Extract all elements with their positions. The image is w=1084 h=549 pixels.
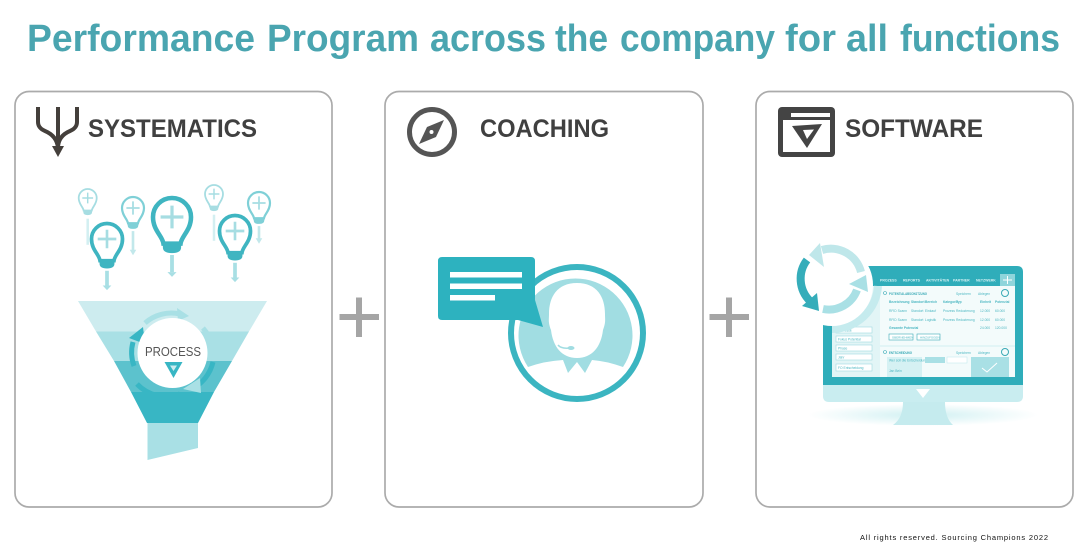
section: potential table: Standort	[911, 309, 924, 313]
title: Program	[267, 18, 419, 60]
title	[27, 18, 1060, 60]
icon: light bulbs	[79, 185, 270, 290]
monitor shadow	[808, 404, 1038, 426]
section: potential table: Potenzial	[995, 300, 1010, 304]
section: potential table: Ablegen	[978, 292, 990, 296]
section: potential table: HINZUFÜGEN	[920, 336, 940, 340]
sidebar: Jahr	[838, 356, 845, 360]
section: potential table: Einkauf	[925, 309, 936, 313]
nav bar: PARTNER	[953, 278, 970, 282]
section: decision: Ablegen	[978, 351, 990, 355]
heading: software: SOFTWARE	[845, 115, 983, 143]
heading: coaching: COACHING	[480, 115, 609, 143]
title: the	[555, 18, 608, 60]
section: potential table: Prozess	[943, 309, 955, 313]
sync arrows	[791, 243, 878, 329]
head	[549, 283, 605, 358]
title: across	[430, 18, 546, 60]
section: potential table: 12.000	[980, 318, 990, 322]
section: potential table: Reduzierung	[956, 318, 975, 322]
footer: All rights reserved. Sourcing Champions 2022	[860, 533, 1048, 542]
section: potential table: 120.000	[995, 326, 1007, 330]
title: functions	[900, 18, 1060, 60]
nav bar	[832, 274, 1015, 286]
section: potential table: POTENTIALABSCHÄTZUNG	[889, 291, 927, 296]
section: decision: Jan Bein	[889, 369, 902, 373]
bulb 5	[205, 185, 223, 241]
section: decision: Wer soll die Entscheidung	[889, 358, 927, 362]
sidebar: Fokus Potential	[838, 338, 861, 342]
nav bar: PROZESS	[880, 278, 897, 282]
section: potential table: 60.000	[995, 318, 1005, 322]
nav bar: REPORTS	[903, 278, 921, 282]
title: all	[846, 18, 888, 60]
screen	[832, 274, 1015, 377]
bulb 1	[79, 189, 97, 245]
bulb 3	[153, 198, 191, 277]
section: potential table: Einheit	[980, 300, 992, 304]
nav bar: AKTIVITÄTEN	[926, 278, 950, 282]
shoulders	[518, 278, 632, 373]
section: potential table: Standort	[911, 318, 924, 322]
icon: merging arrows	[38, 107, 77, 157]
sidebar: Phase	[838, 346, 848, 350]
divider band	[880, 345, 1015, 347]
coach portrait	[511, 267, 643, 399]
light arrow	[809, 243, 861, 272]
headset	[558, 345, 570, 348]
section: potential table: Bezeichnung	[889, 300, 910, 304]
panel: coaching	[385, 92, 703, 507]
bulb 2	[122, 197, 144, 255]
monitor chin	[823, 385, 1023, 402]
bulb 4	[92, 224, 122, 290]
funnel	[78, 301, 267, 460]
plus	[340, 298, 379, 337]
section: potential table: 60.000	[995, 309, 1005, 313]
section: potential table: Standort	[911, 300, 925, 304]
bulb 7	[248, 192, 270, 244]
outer sidebar arc	[832, 286, 878, 329]
icon: browser window	[778, 107, 835, 157]
panel: software	[756, 92, 1073, 507]
title: Performance	[27, 18, 255, 60]
sidebar: Prozesse	[838, 328, 852, 332]
section: potential table: Reduzierung	[956, 309, 975, 313]
icon: compass	[410, 110, 454, 154]
section: decision	[884, 348, 1009, 377]
section: decision: ENTSCHEIDUNG	[889, 350, 912, 355]
section: potential table: Prozess	[943, 318, 955, 322]
speech bubble	[438, 257, 543, 327]
section: potential table: Typ	[956, 300, 962, 304]
heading: systematics: SYSTEMATICS	[88, 115, 257, 143]
process logo	[164, 362, 182, 378]
monitor frame	[823, 266, 1023, 385]
plus	[710, 298, 749, 337]
section: decision: Speichern	[956, 351, 971, 355]
section: potential table: Logistik	[925, 318, 937, 322]
section: potential table: Bereich	[925, 300, 937, 304]
title: company	[620, 18, 775, 60]
section: potential table: 12.000	[980, 309, 990, 313]
panel: systematics	[15, 92, 332, 507]
monitor	[808, 266, 1038, 426]
section: potential table: RFID Scann	[889, 309, 907, 313]
section: potential table: Speichern	[956, 292, 971, 296]
sidebar: FO Entscheidung	[838, 366, 864, 370]
process circle	[138, 318, 208, 388]
mid arrow	[823, 275, 868, 310]
process label: PROCESS	[145, 345, 201, 359]
section: potential table: Kategorie	[943, 300, 958, 304]
funnel spout	[148, 423, 198, 460]
section: potential table: 24.000	[980, 326, 990, 330]
title: for	[785, 18, 836, 60]
nav bar: NETZWERK	[976, 278, 996, 282]
section: potential table: Gesamte Potenzial	[889, 326, 918, 330]
chin logo	[916, 389, 930, 398]
process cycle	[129, 308, 219, 397]
bulb 6	[220, 216, 250, 282]
section: potential table: ÜBERNEHMEN	[892, 336, 913, 340]
section: potential table	[884, 290, 1010, 340]
sidebar	[832, 286, 880, 377]
monitor stand	[893, 402, 953, 425]
section: potential table: RFID Scann	[889, 318, 907, 322]
dark arrow	[801, 260, 819, 311]
